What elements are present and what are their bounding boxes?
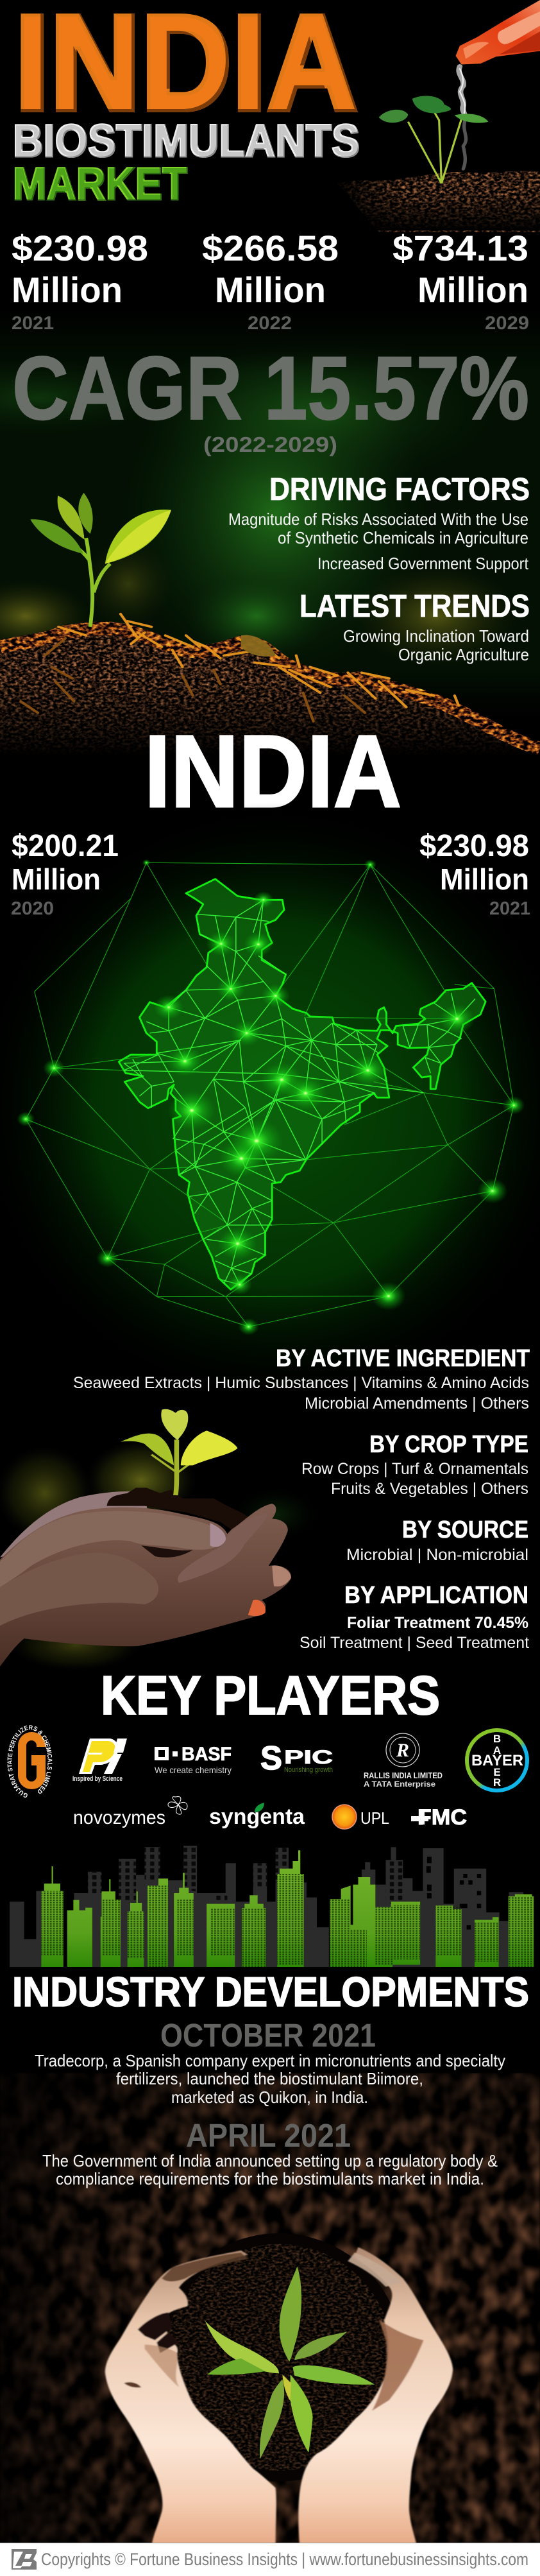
India 2021 stat — [419, 829, 530, 919]
by crop type: Row Crops | Turf & Ornamentals — [301, 1460, 528, 1478]
soil background: developments — [0, 2073, 540, 2543]
factor text — [228, 510, 529, 573]
trend text — [343, 626, 529, 664]
stat 2022: Million — [215, 270, 326, 310]
straw highlights — [21, 614, 458, 721]
footer logo — [12, 2549, 37, 2570]
logo: Rallis: A TATA Enterprise — [364, 1780, 435, 1789]
logo: UPL — [332, 1805, 389, 1829]
map outline — [119, 879, 485, 1289]
soil mound — [0, 621, 540, 767]
by crop type — [301, 1431, 528, 1498]
logo: Bayer: A — [493, 1744, 501, 1756]
soil — [331, 169, 540, 232]
footer — [0, 2543, 540, 2576]
stat 2029: Million — [418, 270, 528, 310]
development: April 2021: The Government of India announced setting up a regulatory body & — [42, 2151, 498, 2170]
stat 2022: $266.58 — [202, 228, 339, 268]
olive bokeh — [0, 1439, 317, 1670]
logo: PI: Inspired by Science — [72, 1775, 122, 1783]
logo: SPIC: Nourishing growth — [284, 1766, 333, 1774]
India 2021 stat: $230.98 — [419, 829, 529, 863]
logo: Bayer — [467, 1730, 527, 1790]
green buildings — [41, 1850, 534, 1967]
photo: hands holding plant — [0, 1409, 317, 1670]
stat 2029 — [392, 228, 529, 334]
hand — [455, 0, 540, 64]
India 2021 stat: Million — [440, 863, 529, 896]
by active ingredient — [73, 1345, 530, 1413]
India network map — [17, 859, 525, 1335]
trend text: Growing Inclination Toward — [343, 626, 529, 646]
stat 2021: 2021 — [12, 313, 54, 334]
key players heading: KEY PLAYERS — [101, 1665, 440, 1726]
development: October 2021: fertilizers, launched the biostimulant Biimore, — [116, 2069, 423, 2088]
stat 2021 — [12, 228, 148, 334]
India 2020 stat: 2020 — [11, 898, 54, 919]
logos — [8, 1725, 529, 1830]
back hand — [0, 1491, 148, 1558]
title: Market: MARKET — [13, 159, 187, 210]
development: October 2021: marketed as Quikon, in India. — [171, 2088, 368, 2107]
logo: GSFC: GUJARAT STATE FERTILIZERS & CHEMICALS LIMITED — [8, 1725, 53, 1798]
logo: UPL: UPL — [360, 1808, 389, 1828]
stat 2029: 2029 — [485, 313, 529, 334]
logo: Bayer: BAYER — [471, 1752, 523, 1769]
development: April 2021: APRIL 2021 — [186, 2117, 351, 2154]
development: October 2021 — [35, 2017, 505, 2107]
by application: Foliar Treatment 70.45% — [347, 1614, 528, 1632]
logo: Novozymes: novozymes — [73, 1807, 165, 1828]
logo: Rallis: RALLIS INDIA LIMITED — [364, 1771, 443, 1780]
soil — [106, 1488, 249, 1532]
logo: Rallis: R — [396, 1740, 409, 1761]
glowing nodes — [17, 859, 525, 1335]
logo: PI — [72, 1739, 127, 1783]
stat 2021: $230.98 — [12, 228, 148, 268]
India heading: INDIA — [144, 714, 401, 829]
photo: hands cupping seedling — [105, 2233, 453, 2546]
seedling leaves — [205, 2267, 375, 2459]
logo: SPIC — [260, 1740, 333, 1777]
stat 2021: Million — [12, 270, 122, 310]
logo: Syngenta: syngenta — [209, 1805, 305, 1829]
logo: BASF — [155, 1744, 232, 1775]
by source — [346, 1516, 528, 1564]
development: October 2021: OCTOBER 2021 — [160, 2017, 376, 2054]
logo: FMC: FMC — [418, 1805, 467, 1830]
seedling — [379, 96, 488, 184]
title: Biostimulants: BIOSTIMULANTS — [13, 116, 360, 167]
logo: Bayer: E — [493, 1766, 501, 1778]
water stream — [459, 67, 466, 169]
by application: Soil Treatment | Seed Treatment — [300, 1634, 529, 1652]
logo: BASF: We create chemistry — [155, 1765, 232, 1775]
by active ingredient: Seaweed Extracts | Humic Substances | Vitamins & Amino Acids — [73, 1374, 529, 1392]
driving factors — [228, 472, 530, 573]
stat 2029: $734.13 — [392, 228, 528, 268]
CAGR: (2022-2029) — [203, 433, 337, 456]
by application — [300, 1582, 529, 1652]
by active ingredient: Microbial Amendments | Others — [305, 1395, 529, 1413]
latest trends — [300, 589, 530, 664]
city skyline — [10, 1846, 534, 1967]
logo: Rallis — [364, 1733, 443, 1789]
India 2021 stat: 2021 — [489, 898, 530, 919]
development: April 2021: compliance requirements for the biostimulants market in India. — [56, 2169, 484, 2188]
plant — [121, 1409, 238, 1495]
logo: SPIC: PIC — [284, 1747, 333, 1768]
outer network lines — [26, 863, 514, 1327]
logo: SPIC: S — [260, 1740, 282, 1777]
India 2020 stat: Million — [12, 863, 101, 896]
logo: Bayer: B — [493, 1733, 501, 1745]
logo: BASF: BASF — [181, 1744, 232, 1765]
development: April 2021 — [42, 2117, 498, 2188]
India 2020 stat — [11, 829, 119, 919]
soil in hands — [155, 2233, 403, 2482]
development: October 2021: Tradecorp, a Spanish company expert in micronutrients and specialty — [35, 2051, 505, 2070]
front hands — [0, 1504, 291, 1667]
stat 2022: 2022 — [248, 313, 292, 334]
grey buildings — [10, 1846, 523, 1967]
photo: seedling on soil mound — [0, 493, 540, 767]
by source: Microbial | Non-microbial — [346, 1546, 528, 1564]
logo: Novozymes — [73, 1797, 187, 1828]
map glow background — [0, 802, 540, 1405]
building windows — [41, 1874, 534, 1967]
green bokeh background — [0, 308, 540, 719]
trend text: Organic Agriculture — [398, 645, 529, 664]
left hand — [105, 2251, 276, 2546]
right hand — [298, 2247, 453, 2546]
by crop type: Fruits & Vegetables | Others — [331, 1480, 528, 1498]
inner mesh lines — [124, 900, 475, 1285]
logo: Bayer: R — [493, 1776, 501, 1789]
title — [13, 0, 360, 210]
market size stats — [12, 228, 529, 334]
photo: hand watering seedling — [331, 0, 540, 232]
seedling — [30, 493, 171, 627]
India 2020 stat: $200.21 — [12, 829, 119, 863]
stat 2022 — [202, 228, 339, 334]
